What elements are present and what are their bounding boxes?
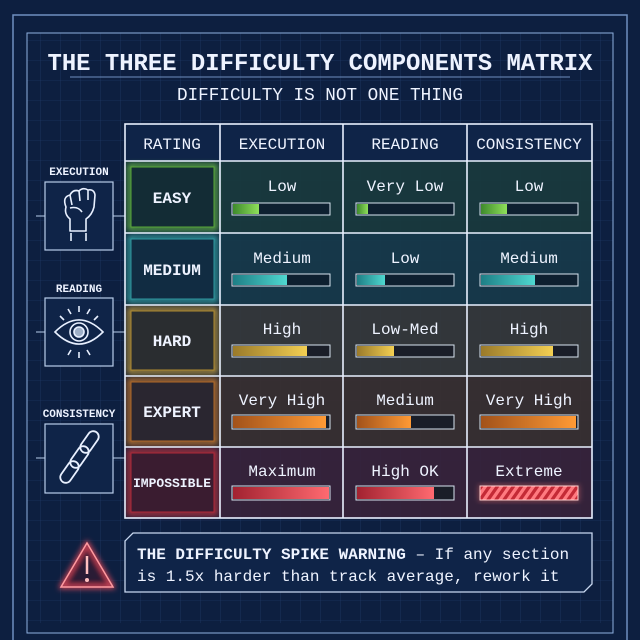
header row: RATING	[143, 136, 201, 154]
icon: execution fist: EXECUTION	[49, 167, 109, 179]
row: medium: Medium	[500, 250, 558, 268]
row: impossible: Extreme	[495, 463, 563, 481]
header row: EXECUTION	[239, 136, 325, 154]
row: medium	[125, 233, 592, 305]
header row: READING	[371, 136, 439, 154]
row: easy: Low	[515, 178, 544, 196]
callout: spike warning: THE DIFFICULTY SPIKE WARNING – If any section	[137, 546, 569, 564]
row: medium: MEDIUM	[143, 262, 201, 280]
row: hard	[125, 305, 592, 376]
row: impossible: Maximum	[248, 463, 316, 481]
row: hard: High	[510, 321, 548, 339]
icon: consistency chain: CONSISTENCY	[43, 409, 116, 421]
icon: execution fist	[36, 167, 125, 250]
row: hard: Low-Med	[371, 321, 439, 339]
subtitle: DIFFICULTY IS NOT ONE THING	[177, 86, 463, 106]
row: expert: Medium	[376, 392, 434, 410]
header row	[125, 124, 592, 161]
row: medium: Low	[391, 250, 420, 268]
row: impossible	[125, 447, 592, 518]
icon: warning triangle	[61, 543, 113, 587]
icon: reading eye	[36, 284, 125, 366]
row: hard: High	[263, 321, 301, 339]
row: hard: HARD	[153, 333, 191, 351]
row: expert: Very High	[239, 392, 325, 410]
row: easy	[125, 161, 592, 233]
table	[125, 124, 592, 518]
header row: CONSISTENCY	[476, 136, 582, 154]
icon: reading eye: READING	[56, 284, 102, 296]
row: medium: Medium	[253, 250, 311, 268]
row: expert: Very High	[486, 392, 572, 410]
row: easy: Low	[268, 178, 297, 196]
row: easy: EASY	[153, 190, 192, 208]
icon: consistency chain	[36, 409, 125, 493]
callout: spike warning	[125, 533, 592, 592]
callout: spike warning: is 1.5x harder than track average, rework it	[137, 568, 559, 586]
row: expert	[125, 376, 592, 447]
row: impossible: IMPOSSIBLE	[133, 476, 211, 491]
row: easy: Very Low	[367, 178, 444, 196]
title: THE THREE DIFFICULTY COMPONENTS MATRIX	[48, 51, 593, 78]
row: expert: EXPERT	[143, 404, 201, 422]
row: impossible: High OK	[371, 463, 439, 481]
